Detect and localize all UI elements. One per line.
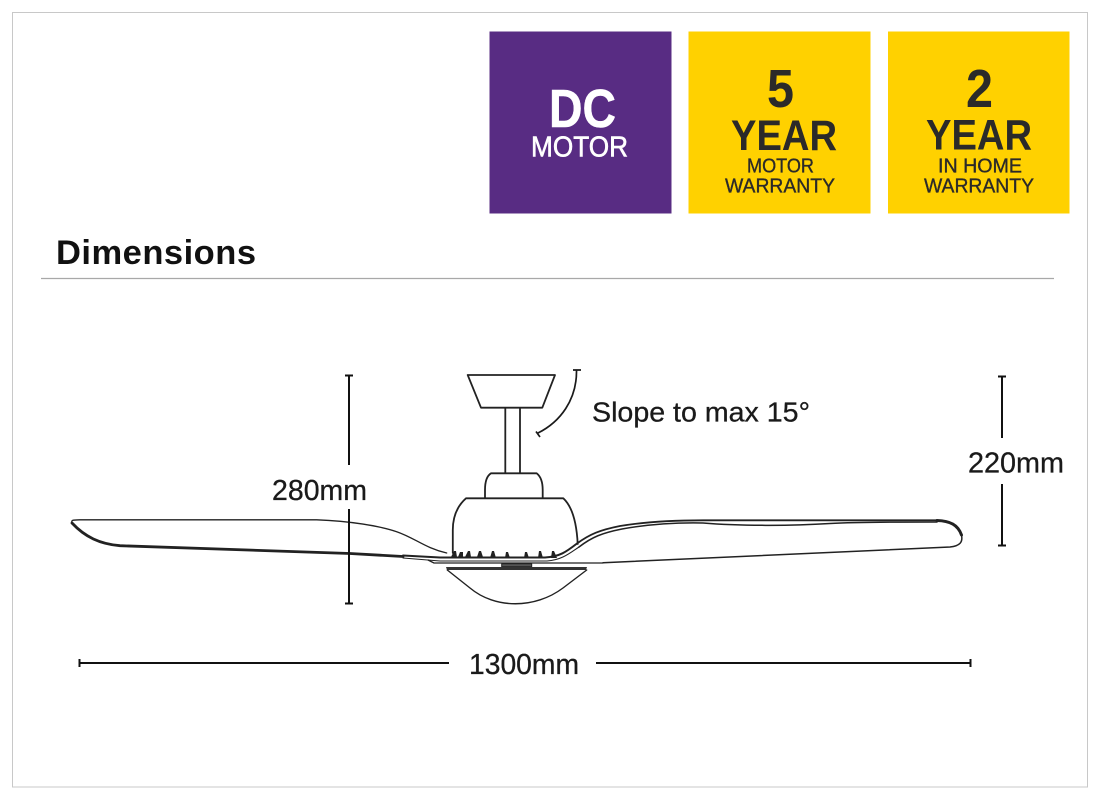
blade hub lines (403, 544, 577, 558)
dimension: 280mm height (272, 375, 367, 604)
badge: 2 year in home warranty: YEAR (926, 112, 1032, 160)
dimension: 220mm height (968, 376, 1064, 546)
badge: 5 year motor warranty: WARRANTY (725, 174, 835, 198)
badge: 5 year motor warranty (688, 32, 870, 214)
light plate (502, 564, 532, 567)
motor coupling (485, 473, 543, 498)
badge: DC motor (490, 32, 672, 214)
dimension: 1300mm width: 1300mm (469, 649, 579, 681)
badge: DC motor: MOTOR (531, 132, 628, 164)
badge: DC motor: DC (549, 79, 616, 139)
badge: 2 year in home warranty: WARRANTY (924, 174, 1034, 198)
motor vents (451, 551, 557, 558)
motor housing (453, 498, 578, 553)
right blade (577, 520, 962, 563)
left blade (72, 520, 447, 556)
canopy (468, 375, 555, 408)
badge: 5 year motor warranty: YEAR (731, 112, 837, 160)
badge: 2 year in home warranty: 2 (966, 59, 993, 119)
badge: 5 year motor warranty: 5 (767, 59, 794, 119)
label: slope: Slope to max 15° (592, 396, 810, 428)
downrod (505, 408, 520, 473)
badge: 2 year in home warranty (888, 32, 1070, 214)
badge: 2 year in home warranty: IN HOME (938, 154, 1022, 178)
fan line drawing (72, 375, 962, 604)
tilt arrow (536, 370, 581, 437)
badge: 5 year motor warranty: MOTOR (747, 154, 814, 178)
dimension: 220mm height: 220mm (968, 448, 1064, 480)
heading: Dimensions: Dimensions (56, 234, 256, 272)
light bowl (447, 570, 587, 604)
dimension: 280mm height: 280mm (272, 475, 367, 507)
dimension: 1300mm width (79, 649, 971, 681)
